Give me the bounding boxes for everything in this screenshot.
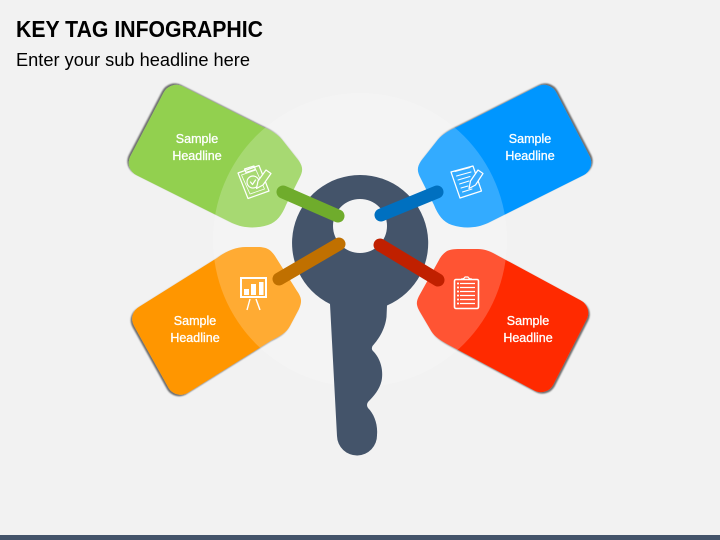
tag: blue — [418, 85, 591, 227]
key — [292, 175, 428, 455]
string: red — [380, 245, 438, 280]
translucent halo circle — [213, 93, 507, 387]
bottom bar — [0, 535, 720, 540]
label: orange tag: Headline — [170, 331, 220, 345]
string: orange — [279, 244, 339, 279]
subtitle: Enter your sub headline here — [16, 50, 250, 70]
label: blue tag: Headline — [505, 149, 555, 163]
label: red tag: Sample — [507, 314, 549, 328]
string: blue — [381, 192, 437, 215]
label: red tag: Headline — [503, 331, 553, 345]
icon: clipboard with check — [238, 166, 271, 198]
label: green tag: Headline — [172, 149, 222, 163]
label: green tag: Sample — [176, 132, 218, 146]
tag: orange — [132, 247, 301, 395]
tag: green — [129, 85, 302, 227]
string: green — [283, 192, 338, 216]
icon: notepad with pencil — [451, 166, 483, 198]
title: KEY TAG INFOGRAPHIC — [16, 16, 263, 42]
tag: red — [417, 249, 588, 392]
icon: presentation board — [241, 278, 266, 310]
label: orange tag: Sample — [174, 314, 216, 328]
label: blue tag: Sample — [509, 132, 551, 146]
icon: checklist clipboard — [454, 277, 478, 308]
